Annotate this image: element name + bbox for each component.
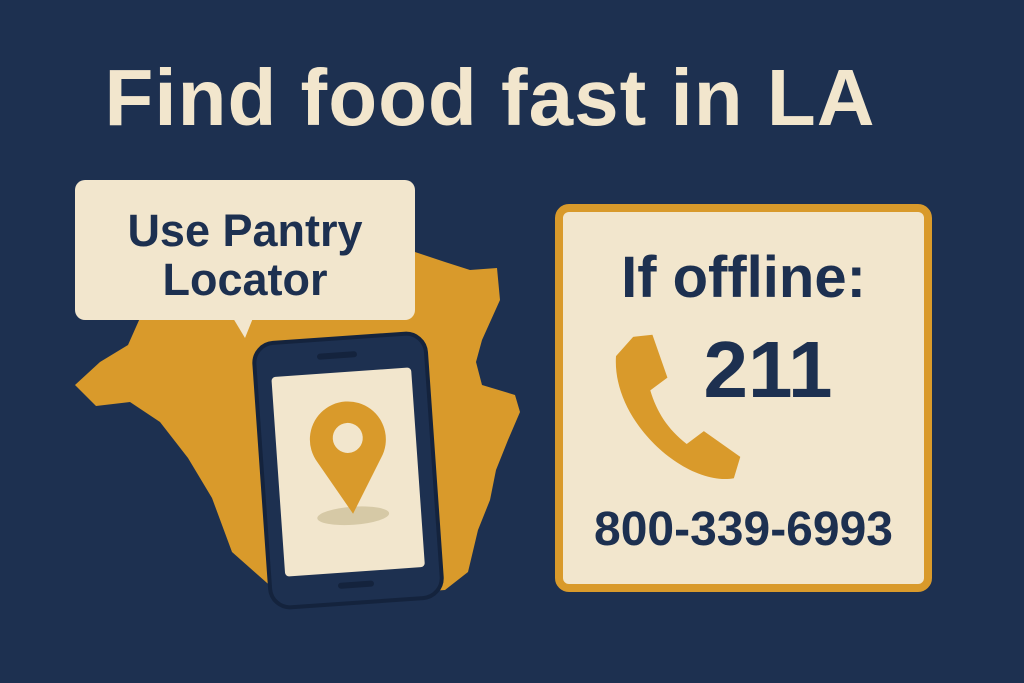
phone number: 800-339-6993 [594, 503, 893, 556]
panel: offline contact [555, 204, 932, 592]
speech bubble: Locator [162, 254, 328, 305]
speech bubble [75, 180, 415, 338]
speech bubble: Use Pantry [127, 205, 363, 256]
title: Find food fast in LA [104, 53, 875, 142]
phone with location pin [253, 332, 443, 609]
heading: If offline: If offline: [621, 245, 866, 310]
icon: phone handset [616, 334, 740, 479]
number 211: 211 [703, 325, 833, 414]
map of LA county [75, 252, 520, 600]
